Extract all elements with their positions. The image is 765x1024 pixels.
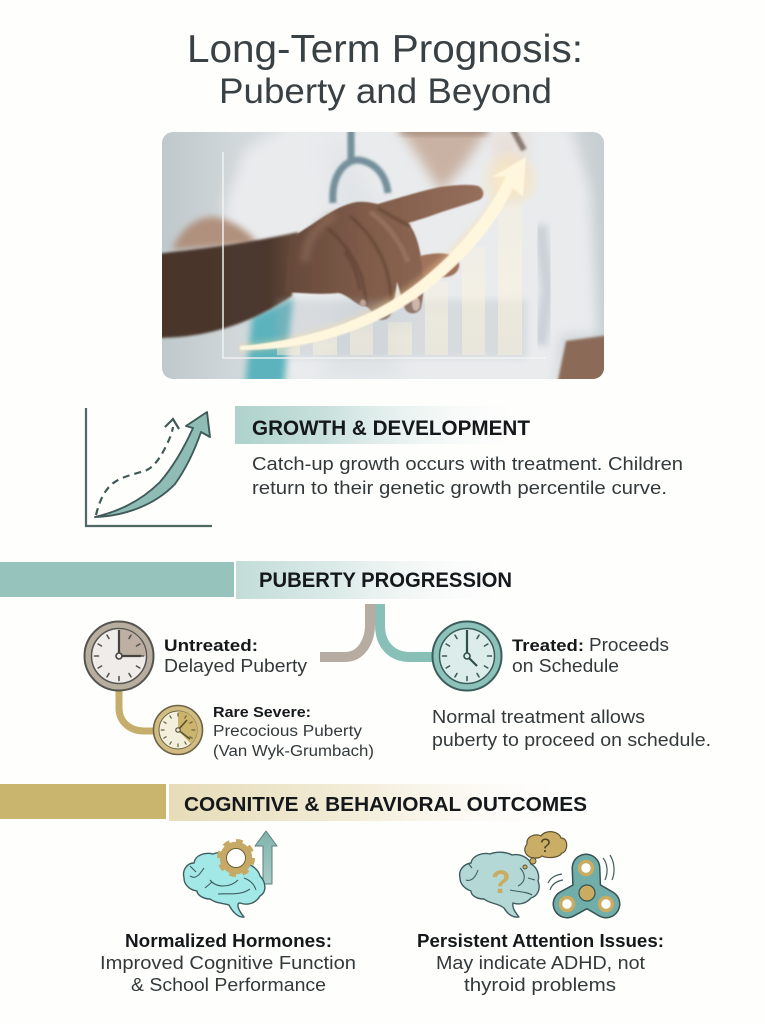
text: persistent attention issues: May indicate ADHD, not [436,953,645,973]
heading: COGNITIVE & BEHAVIORAL OUTCOMES [184,794,587,816]
text: normalized hormones: Normalized Hormones: [125,931,332,951]
note: normal treatment [432,707,711,750]
thought cloud: ? [540,836,551,857]
label: treated: on Schedule [512,656,619,676]
heading band [0,561,526,599]
text: normalized hormones: Improved Cognitive Function [100,953,356,973]
connector: branching paths [320,604,436,657]
title [187,28,583,111]
heading: PUBERTY PROGRESSION [259,569,512,592]
body text: Catch-up growth occurs with treatment. Children [252,454,683,474]
hand [285,185,483,320]
label: rare severe: Rare Severe: [213,704,311,721]
icon: rare severe clock [154,706,202,754]
chart bars [277,300,527,358]
photo: doctor's hand pointing at rising growth chart [155,125,610,390]
right elbow [556,334,604,379]
chart axes [223,152,546,358]
text: normalized hormones [100,931,356,995]
connector: untreated to rare severe [119,688,156,731]
text: persistent attention issues [417,931,664,995]
heading band [0,784,599,821]
shirt [225,125,598,390]
gear [220,842,252,874]
text: normalized hormones: & School Performance [131,975,326,995]
title: Puberty and Beyond [219,72,552,111]
panel: puberty progression [0,561,711,760]
fingernails [412,297,420,311]
finger shading [327,208,410,312]
brain [184,853,265,917]
label: rare severe: (Van Wyk-Grumbach) [213,743,374,760]
panel: growth and development [86,406,683,526]
note: normal treatment: puberty to proceed on schedule. [432,730,711,750]
neck [396,132,491,188]
back finger [420,253,459,280]
label: treated: Treated: [512,636,584,655]
question mark: ? [491,864,511,900]
text: persistent attention issues: thyroid problems [464,975,616,995]
body text: return to their genetic growth percentile curve. [252,478,667,498]
label: treated [512,635,669,676]
stethoscope [333,128,388,203]
icon: brain with gear and up arrow [184,831,277,917]
icon: growth chart [86,408,212,526]
label: rare severe [213,704,374,760]
icon: untreated clock [84,622,154,690]
glowing arrow [482,154,538,208]
icon: brain with question mark and fidget spinner [460,832,614,917]
text: persistent attention issues: Persistent Attention Issues: [417,931,664,951]
note: normal treatment: Normal treatment allows [432,707,645,727]
panel: cognitive and behavioral outcomes [0,784,664,995]
motion lines [548,855,614,890]
label: rare severe: Precocious Puberty [213,723,362,740]
thought cloud [523,832,567,869]
teal shirt [245,298,293,385]
label: untreated [164,636,307,676]
fidget spinner [560,862,612,910]
arrow [255,831,277,884]
body text [252,454,683,498]
heading band [235,406,535,444]
heading: GROWTH & DEVELOPMENT [252,417,530,440]
upper arm [172,217,258,250]
icon: treated clock [432,622,502,690]
brain [460,852,539,917]
label: untreated: Delayed Puberty [164,656,307,676]
title: Long-Term Prognosis: [187,28,583,71]
label: untreated: Untreated: [164,636,258,655]
label: treated: Proceeds [589,635,669,655]
forearm [155,232,298,338]
